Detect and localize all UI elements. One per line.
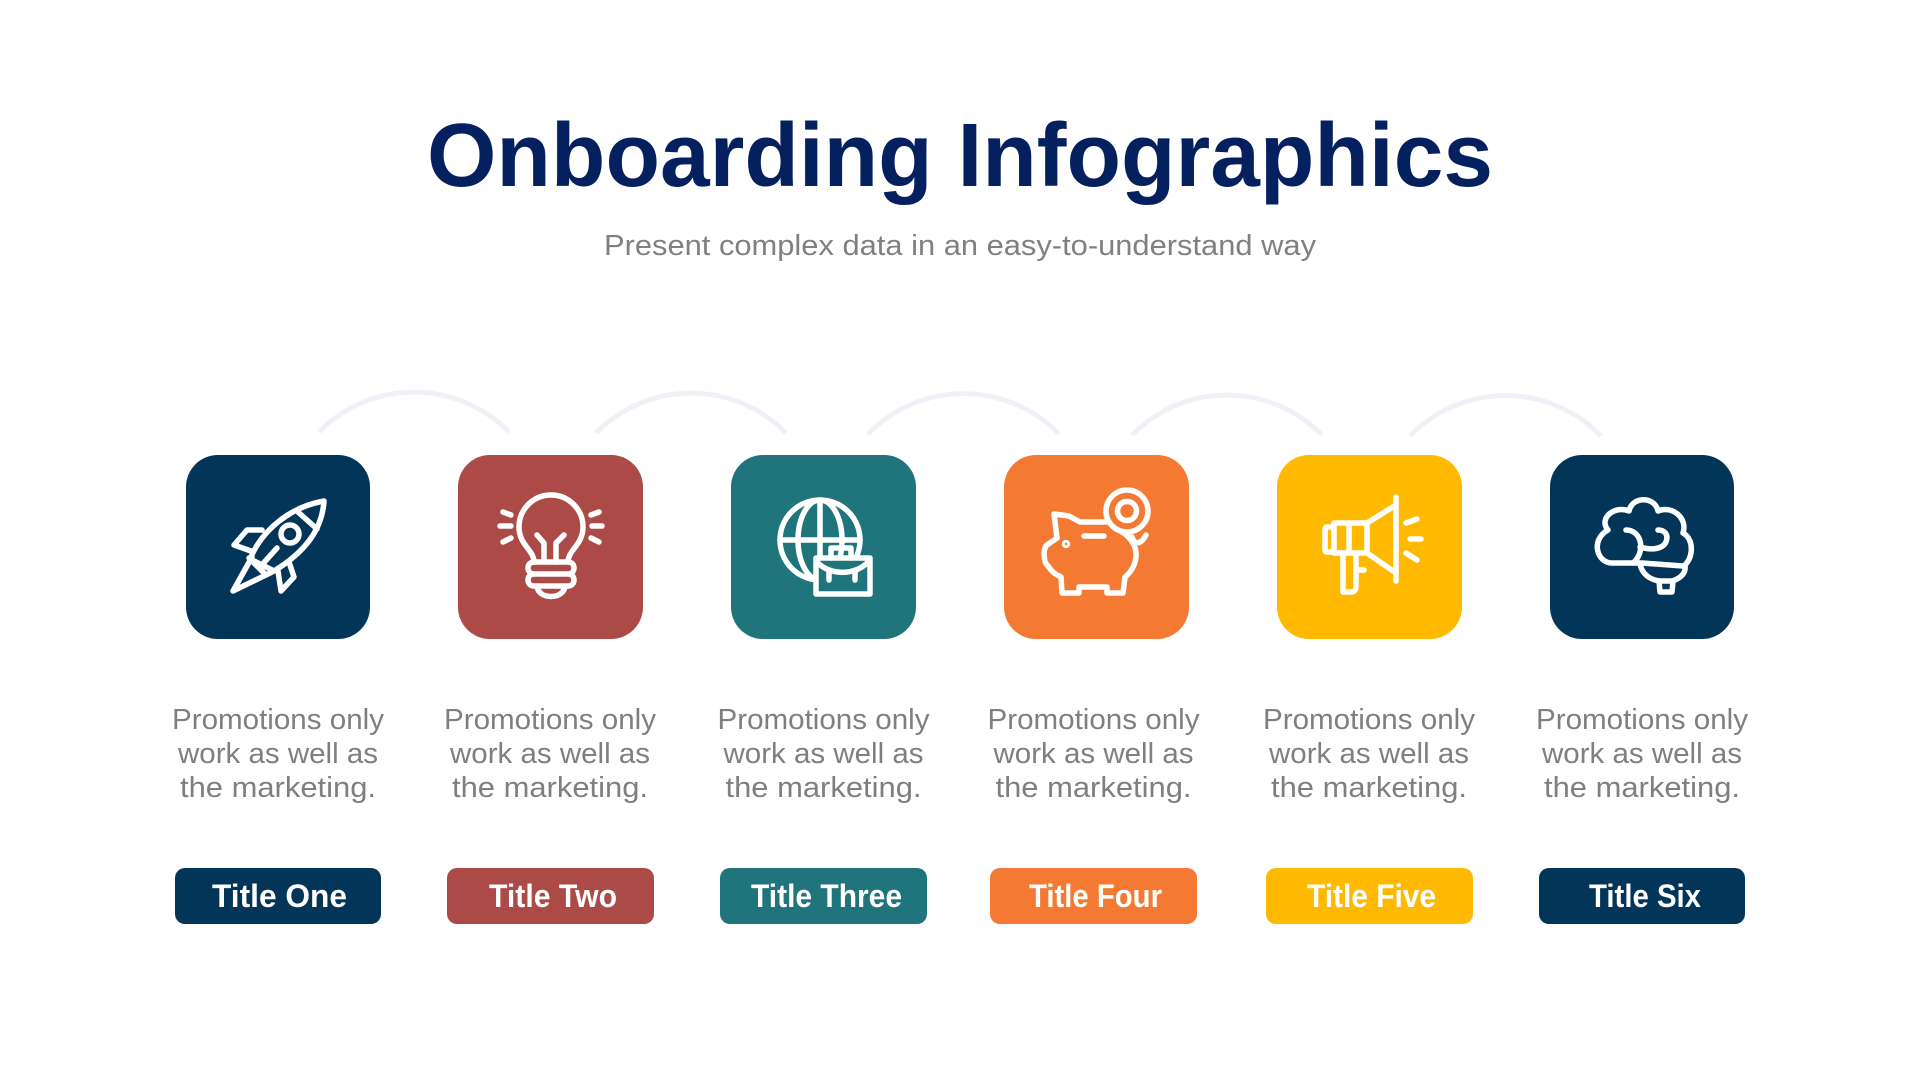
description: work as well as xyxy=(992,738,1194,770)
description: the marketing. xyxy=(180,772,376,804)
description: Promotions only xyxy=(988,704,1200,736)
title pill: Title Six xyxy=(1589,878,1701,914)
icon card: rocket xyxy=(186,455,370,639)
title pill: Title One xyxy=(212,878,347,914)
panel: step six xyxy=(1536,455,1748,924)
panel: step one xyxy=(172,455,384,924)
description: the marketing. xyxy=(726,772,922,804)
icon card: light bulb xyxy=(458,455,643,639)
title: Onboarding Infographics xyxy=(427,106,1493,206)
description: Promotions only xyxy=(444,704,656,736)
description xyxy=(172,704,384,804)
subtitle: Present complex data in an easy-to-understand way xyxy=(604,230,1317,262)
description: the marketing. xyxy=(1271,772,1467,804)
panel: step four xyxy=(988,455,1200,924)
description: Promotions only xyxy=(1536,704,1748,736)
icon card: piggy bank and coin xyxy=(1004,455,1189,639)
description: Promotions only xyxy=(718,704,930,736)
title pill: Title Four xyxy=(1029,878,1162,914)
title pill xyxy=(175,868,381,924)
title pill xyxy=(447,868,654,924)
description: the marketing. xyxy=(996,772,1192,804)
description xyxy=(988,704,1200,804)
description: work as well as xyxy=(177,738,378,770)
panel: step two xyxy=(444,455,656,924)
title pill xyxy=(720,868,927,924)
panel: step five xyxy=(1263,455,1475,924)
title pill: Title Two xyxy=(489,878,617,914)
icon card: megaphone xyxy=(1277,455,1462,639)
title pill xyxy=(990,868,1197,924)
connector arcs xyxy=(319,392,1601,436)
description xyxy=(444,704,656,804)
panel: step three xyxy=(718,455,930,924)
icon card: globe with briefcase xyxy=(731,455,916,639)
title pill xyxy=(1266,868,1473,924)
title pill: Title Three xyxy=(751,878,902,914)
description xyxy=(1263,704,1475,804)
description: Promotions only xyxy=(172,704,384,736)
description: work as well as xyxy=(722,738,924,770)
description: work as well as xyxy=(449,738,650,770)
description xyxy=(718,704,930,804)
description: work as well as xyxy=(1268,738,1469,770)
title pill xyxy=(1539,868,1745,924)
description xyxy=(1536,704,1748,804)
title pill: Title Five xyxy=(1307,878,1436,914)
description: Promotions only xyxy=(1263,704,1475,736)
description: work as well as xyxy=(1541,738,1742,770)
icon card: brain with bulb xyxy=(1550,455,1734,639)
description: the marketing. xyxy=(452,772,648,804)
description: the marketing. xyxy=(1544,772,1740,804)
